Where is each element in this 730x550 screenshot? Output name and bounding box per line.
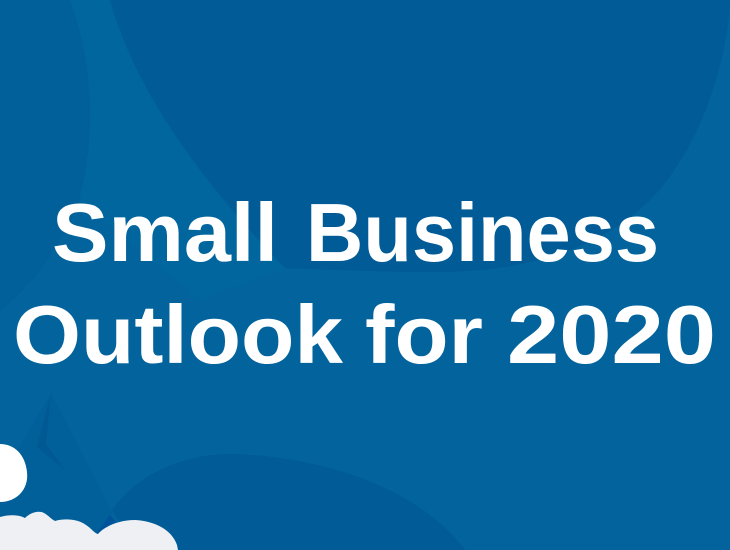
background shape: large dark area at top	[110, 0, 730, 272]
title line 1: Business	[306, 186, 659, 279]
title line 2: 2020	[507, 288, 716, 381]
background shape: small dark triangle	[37, 393, 65, 470]
background shape: dark area at bottom	[112, 454, 465, 550]
background shape: overlap of triangle and circle	[84, 515, 140, 550]
title line 1: Small	[52, 186, 278, 279]
icon: pale cloud at bottom	[0, 512, 178, 550]
title	[13, 186, 716, 381]
title line 2: Outlook	[13, 288, 344, 381]
title line 2	[13, 288, 716, 381]
title line 2: for	[365, 288, 483, 381]
title line 1	[52, 186, 659, 279]
background shape: dark area at top left	[0, 0, 90, 310]
background shape: triangle at lower left	[0, 393, 112, 550]
icon: white cloud at left edge	[0, 444, 27, 502]
background shape: light band at top	[70, 0, 285, 300]
